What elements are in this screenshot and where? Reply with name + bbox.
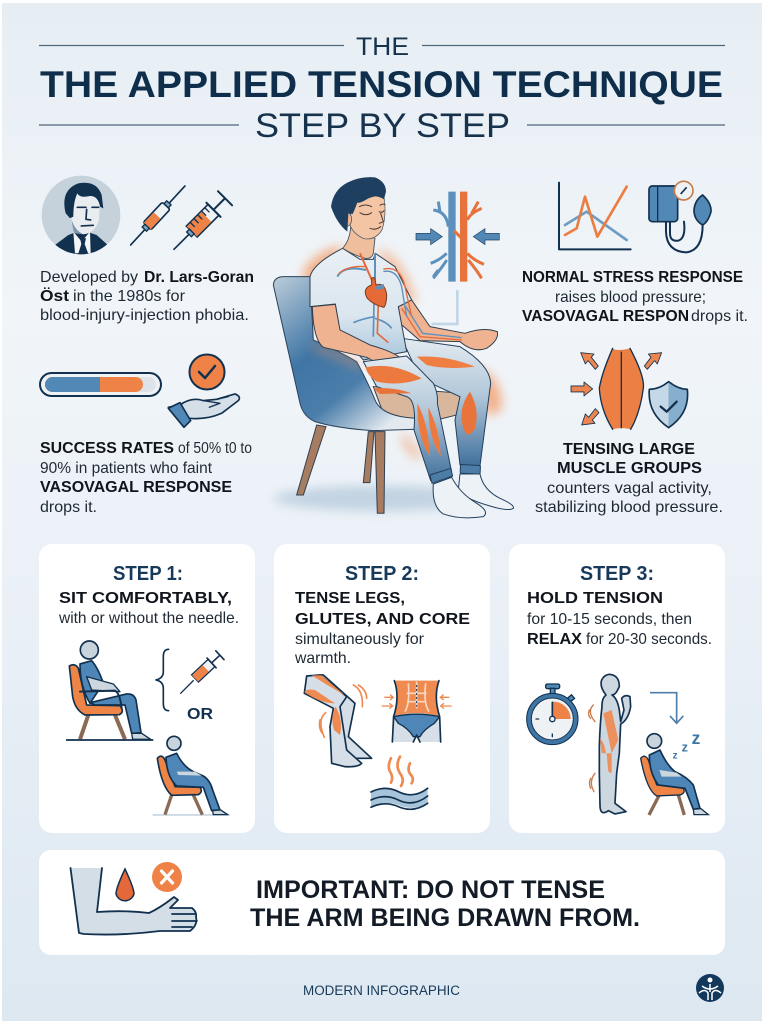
heart bbox=[365, 277, 387, 307]
step 3 text: HOLD TENSION bbox=[527, 590, 663, 607]
text: success rates: drops it. bbox=[40, 499, 97, 516]
chair legs bbox=[297, 425, 385, 513]
title: THE bbox=[356, 33, 409, 61]
icon: syringe large bbox=[174, 191, 232, 249]
step 2 text: GLUTES, AND CORE bbox=[295, 611, 470, 628]
text: normal stress response bbox=[522, 269, 748, 325]
text: success rates bbox=[40, 440, 252, 516]
icon: check badge bbox=[190, 354, 224, 390]
icon: resting person with Z letters: z bbox=[673, 750, 678, 761]
icon: arm bbox=[70, 868, 197, 935]
chair seat bbox=[373, 387, 463, 427]
central illustration: seated man bbox=[273, 177, 513, 518]
step 2 text: warmth. bbox=[294, 650, 351, 667]
step 2 text: TENSE LEGS, bbox=[295, 590, 405, 607]
panel: step 3 bbox=[509, 544, 725, 833]
step 2 text: simultaneously for bbox=[295, 631, 425, 648]
text: normal stress response: VASOVAGAL RESPON bbox=[522, 308, 689, 325]
icon: shield with check bbox=[649, 382, 688, 428]
text: developed by: blood-injury-injection phobia. bbox=[40, 307, 249, 324]
near arm bbox=[312, 304, 408, 372]
icon: blood drop bbox=[116, 869, 134, 901]
far sock bbox=[458, 474, 513, 510]
icon: syringe small bbox=[131, 186, 185, 245]
title bbox=[39, 33, 725, 145]
far leg bbox=[402, 338, 491, 466]
text: developed by bbox=[40, 269, 254, 324]
icon: no symbol bbox=[152, 862, 182, 892]
icon: seated person large bbox=[66, 641, 153, 740]
step 3 heading: STEP 3: bbox=[580, 563, 654, 585]
text: tensing muscle groups: TENSING LARGE bbox=[563, 441, 695, 458]
right arm bbox=[398, 300, 498, 350]
hair bbox=[331, 177, 386, 232]
icon: curly brace bbox=[156, 649, 169, 711]
text: normal stress response: raises blood pressure; bbox=[555, 289, 706, 306]
icon: abdomen bbox=[382, 681, 452, 742]
text: developed by: Developed by bbox=[40, 269, 138, 286]
panel: tensing muscle groups bbox=[535, 348, 723, 516]
text: tensing muscle groups: MUSCLE GROUPS bbox=[557, 460, 702, 477]
icon: resting person with Z letters bbox=[641, 728, 708, 815]
icon: muscle with arrows bbox=[571, 348, 662, 429]
icon: line chart bbox=[559, 183, 631, 249]
icon: open hand bbox=[168, 394, 239, 427]
shirt bbox=[310, 248, 412, 360]
icon: progress bar bbox=[40, 373, 161, 396]
icon: resting person with Z letters: z bbox=[682, 741, 688, 755]
step 3 text: for 20-30 seconds. bbox=[586, 631, 712, 648]
text: success rates: SUCCESS RATES bbox=[40, 440, 174, 457]
text: tensing muscle groups bbox=[535, 441, 723, 516]
text: success rates: of 50% t0 to bbox=[178, 440, 252, 457]
panel: step 1 bbox=[39, 544, 255, 833]
text: normal stress response: NORMAL STRESS RESPONSE bbox=[522, 269, 743, 286]
warning text: THE ARM BEING DRAWN FROM. bbox=[250, 904, 640, 932]
step 1 text bbox=[58, 590, 239, 627]
step 2 text bbox=[294, 590, 470, 667]
neck bbox=[343, 227, 375, 258]
icon: syringe step 1 bbox=[181, 650, 224, 693]
text: success rates: VASOVAGAL RESPONSE bbox=[40, 479, 232, 496]
text: normal stress response: drops it. bbox=[691, 308, 748, 325]
text: developed by: in the 1980s for bbox=[73, 288, 186, 305]
chair shell bbox=[273, 277, 417, 431]
icon: down arrow bbox=[650, 693, 683, 723]
label: OR: OR bbox=[187, 706, 213, 723]
face bbox=[350, 193, 385, 239]
icon: seated person small bbox=[153, 736, 228, 815]
title: STEP BY STEP bbox=[255, 107, 510, 145]
near sock bbox=[433, 477, 486, 518]
panel: success rates bbox=[40, 354, 252, 516]
icon: heat waves bbox=[371, 757, 428, 809]
step 1 text: SIT COMFORTABLY, bbox=[59, 590, 232, 607]
icon: blood pressure cuff bbox=[649, 181, 711, 252]
step 3 text: RELAX bbox=[527, 631, 582, 648]
vessels bbox=[337, 268, 366, 277]
step 3 text bbox=[527, 590, 712, 648]
panel: important warning bbox=[39, 850, 725, 955]
icon: standing tensed figure bbox=[589, 674, 631, 814]
icon: tensed legs bbox=[304, 675, 372, 767]
warning text: IMPORTANT: DO NOT TENSE bbox=[256, 876, 605, 904]
icon: blood vessel constriction bbox=[416, 192, 499, 324]
warning text bbox=[250, 876, 640, 932]
panel: stress response bbox=[522, 181, 748, 325]
step 1 heading: STEP 1: bbox=[113, 563, 183, 585]
near leg bbox=[363, 356, 452, 481]
step 1 text: with or without the needle. bbox=[58, 610, 239, 627]
icon: footer logo bbox=[696, 974, 724, 1002]
icon: resting person with Z letters: z bbox=[692, 728, 701, 748]
panel: step 2 bbox=[274, 544, 490, 833]
icon: doctor portrait bbox=[42, 176, 120, 260]
footer text: MODERN INFOGRAPHIC bbox=[303, 983, 460, 998]
text: tensing muscle groups: counters vagal activity, bbox=[547, 480, 712, 497]
text: developed by: Dr. Lars-Goran bbox=[144, 269, 254, 286]
step 3 text: for 10-15 seconds, then bbox=[527, 611, 692, 628]
text: tensing muscle groups: stabilizing blood pressure. bbox=[535, 499, 723, 516]
step 2 heading: STEP 2: bbox=[345, 563, 419, 585]
text: developed by: Öst bbox=[40, 286, 70, 305]
panel: origin of technique bbox=[40, 176, 254, 324]
title: THE APPLIED TENSION TECHNIQUE bbox=[40, 64, 723, 105]
icon: stopwatch bbox=[527, 684, 578, 745]
text: success rates: 90% in patients who faint bbox=[40, 460, 213, 477]
